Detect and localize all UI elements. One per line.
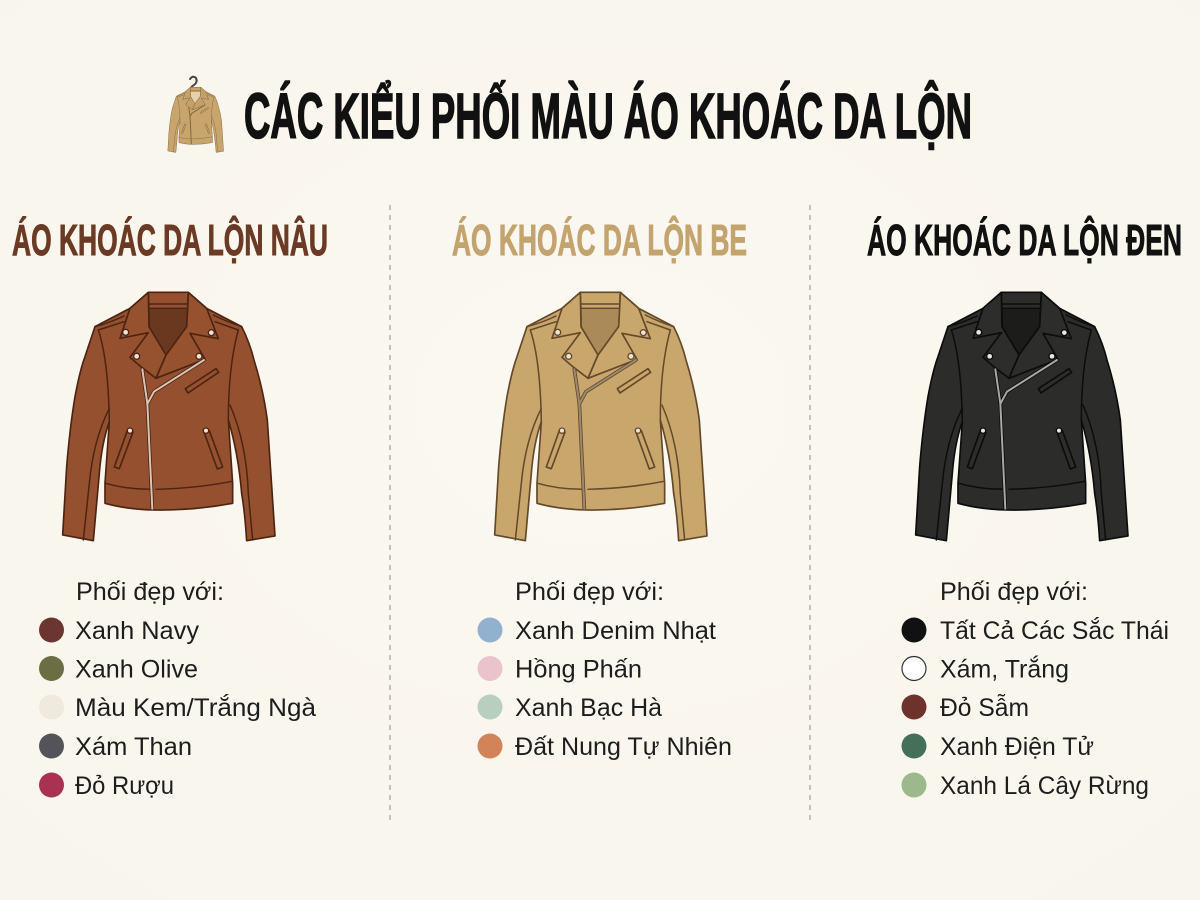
panel: brown suede jacket (12, 214, 328, 800)
list: brown jacket pairings: Xanh Navy (75, 617, 200, 645)
list: black jacket pairings: Xanh Lá Cây Rừng (940, 772, 1149, 800)
icon: tan jacket on hanger (168, 77, 224, 152)
list: black jacket pairings (902, 578, 1169, 800)
list: black jacket pairings: Xanh Điện Tử (940, 733, 1094, 761)
list: black jacket pairings: Xám, Trắng (940, 654, 1069, 684)
list: beige jacket pairings: Đất Nung Tự Nhiên (515, 733, 732, 761)
list: beige jacket pairings: Xanh Denim Nhạt (515, 617, 716, 645)
list: black jacket pairings: Tất Cả Các Sắc Thái (940, 616, 1169, 645)
list: beige jacket pairings: Xanh Bạc Hà (515, 694, 662, 722)
list: brown jacket pairings: Phối đẹp với: (76, 578, 224, 606)
illustration: black jacket (916, 292, 1128, 541)
list: beige jacket pairings (478, 578, 732, 761)
list: black jacket pairings: Phối đẹp với: (940, 578, 1088, 606)
list: beige jacket pairings: Phối đẹp với: (515, 578, 664, 606)
list: brown jacket pairings: Màu Kem/Trắng Ngà (75, 693, 316, 722)
panel: beige suede jacket (452, 214, 747, 761)
list: brown jacket pairings (39, 578, 316, 800)
illustration: brown jacket (63, 292, 275, 541)
illustration: beige jacket (495, 292, 707, 541)
divider right (809, 205, 811, 822)
panel: black suede jacket (867, 214, 1182, 800)
heading: brown: ÁO KHOÁC DA LỘN NÂU (12, 214, 328, 265)
list: brown jacket pairings: Xám Than (75, 733, 192, 761)
list: brown jacket pairings: Xanh Olive (75, 656, 198, 684)
heading: beige: ÁO KHOÁC DA LỘN BE (452, 214, 747, 265)
list: beige jacket pairings: Hồng Phấn (515, 656, 642, 684)
list: black jacket pairings: Đỏ Sẫm (940, 693, 1029, 722)
divider left (389, 205, 391, 822)
list: brown jacket pairings: Đỏ Rượu (75, 772, 174, 800)
